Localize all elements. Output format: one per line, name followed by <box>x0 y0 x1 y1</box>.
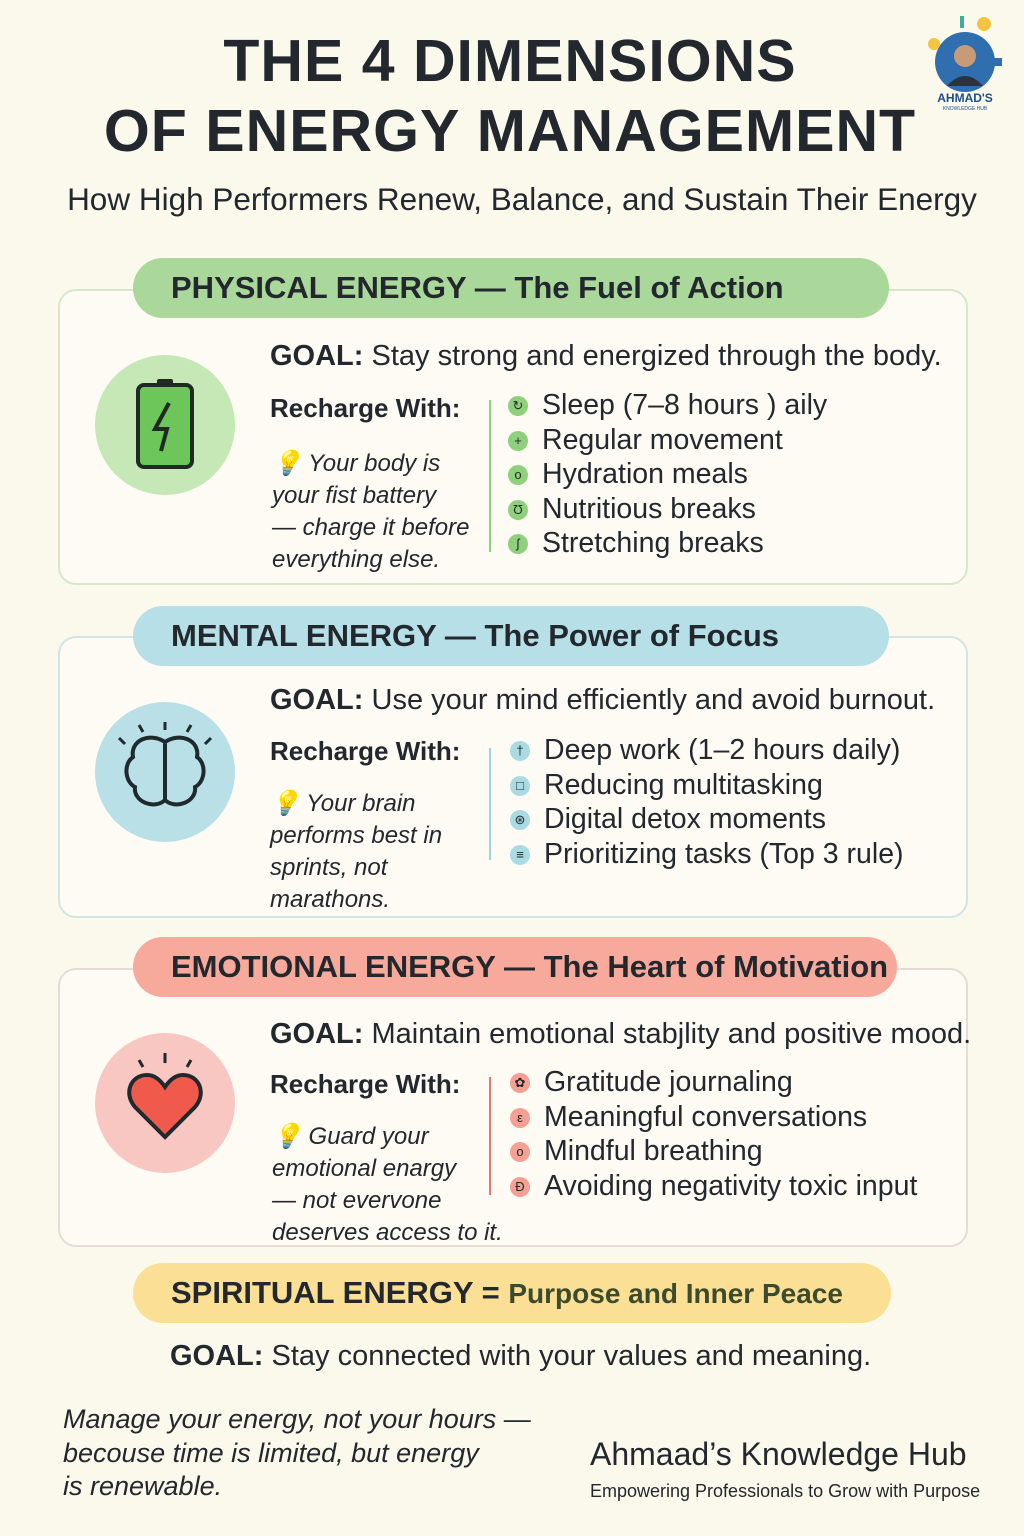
icon: battery <box>95 355 235 495</box>
tip: physical <box>270 450 469 573</box>
goal: mental: GOAL: Use your mind efficiently and avoid burnout. <box>270 684 935 716</box>
tip: mental: 💡 Your brain <box>270 790 416 817</box>
recharge: emotional: Recharge With: <box>270 1069 460 1099</box>
tip: emotional <box>272 1122 503 1246</box>
header: spiritual: SPIRITUAL ENERGY = Purpose and Inner Peace <box>171 1275 843 1310</box>
footer brand <box>590 1436 980 1501</box>
list: mental: ⊛ <box>515 812 525 827</box>
list: emotional: o <box>516 1144 524 1159</box>
title: THE 4 DIMENSIONS <box>223 28 797 94</box>
recharge: physical: Recharge With: <box>270 393 460 423</box>
tip: mental: performs best in <box>270 822 442 849</box>
list: physical: o <box>514 467 522 482</box>
tip: mental <box>269 790 442 913</box>
header: mental: MENTAL ENERGY — The Power of Focus <box>171 618 779 653</box>
list: emotional: ε <box>517 1110 523 1124</box>
tip: physical: 💡 Your body is <box>272 450 440 477</box>
goal: emotional: GOAL: Maintain emotional stabjlity and positive mood. <box>270 1018 971 1050</box>
panel: mental <box>58 636 968 918</box>
tip: emotional: 💡 Guard your <box>272 1123 429 1150</box>
icon: heart <box>95 1033 235 1173</box>
recharge: mental: Recharge With: <box>270 736 460 766</box>
list: mental: □ <box>516 778 524 792</box>
tip: physical: everything else. <box>272 546 440 573</box>
list: mental: Deep work (1–2 hours daily) <box>544 734 900 766</box>
goal: spiritual: GOAL: Stay connected with your values and meaning. <box>170 1340 871 1372</box>
footer quote: becouse time is limited, but energy <box>63 1438 479 1468</box>
list: emotional: Meaningful conversations <box>544 1100 867 1132</box>
header: spiritual <box>133 1263 891 1323</box>
tip: physical: — charge it before <box>272 514 469 541</box>
tip: mental: sprints, not <box>270 854 387 881</box>
footer quote: is renewable. <box>63 1471 222 1501</box>
tip: physical: your fist battery <box>272 482 436 509</box>
list: mental: Prioritizing tasks (Top 3 rule) <box>544 838 904 870</box>
list: emotional: Avoiding negativity toxic input <box>544 1170 917 1202</box>
header: emotional: EMOTIONAL ENERGY — The Heart of Motivation <box>171 949 888 984</box>
title: OF ENERGY MANAGEMENT <box>104 98 916 164</box>
icon: brain <box>95 702 235 842</box>
header: emotional <box>133 937 897 997</box>
list: emotional: Mindful breathing <box>544 1135 763 1167</box>
tip: emotional: emotional enargy <box>272 1155 456 1182</box>
list: emotional <box>510 1066 918 1202</box>
list: mental: Reducing multitasking <box>544 768 823 800</box>
panel: emotional <box>58 968 968 1247</box>
list: physical: Sleep (7–8 hours ) aily <box>542 389 827 421</box>
list: physical: + <box>514 432 522 448</box>
title <box>104 28 916 164</box>
header: physical: PHYSICAL ENERGY — The Fuel of Action <box>171 270 784 305</box>
header: physical <box>133 258 889 318</box>
list: physical: ʃ <box>517 536 519 551</box>
tip: emotional: deserves access to it. <box>272 1219 503 1246</box>
list: mental: † <box>516 743 524 758</box>
header: mental <box>133 606 889 666</box>
list: physical: Hydration meals <box>542 458 748 490</box>
list: mental: ≡ <box>516 846 524 862</box>
panel: physical <box>58 289 968 585</box>
footer quote <box>63 1404 531 1501</box>
list: physical: Ʊ <box>513 502 523 516</box>
subtitle: How High Performers Renew, Balance, and Sustain Their Energy <box>67 181 977 217</box>
list: emotional: ✿ <box>515 1075 525 1090</box>
list: physical: Nutritious breaks <box>542 492 756 524</box>
footer brand: Empowering Professionals to Grow with Purpose <box>590 1481 980 1501</box>
footer quote: Manage your energy, not your hours — <box>63 1404 531 1434</box>
list: physical: Stretching breaks <box>542 527 764 559</box>
list: mental <box>510 734 904 870</box>
logo: AHMAD'S <box>937 91 993 105</box>
list: physical: Regular movement <box>542 424 783 456</box>
list: physical <box>508 389 827 559</box>
list: emotional: Ð <box>515 1178 525 1194</box>
list: mental: Digital detox moments <box>544 803 826 835</box>
tip: emotional: — not evervone <box>272 1187 441 1214</box>
logo <box>928 16 1002 110</box>
tip: mental: marathons. <box>270 886 390 913</box>
goal: physical: GOAL: Stay strong and energized through the body. <box>270 340 942 372</box>
list: physical: ↻ <box>513 398 523 413</box>
list: emotional: Gratitude journaling <box>544 1066 793 1098</box>
footer brand: Ahmaad’s Knowledge Hub <box>590 1436 967 1472</box>
